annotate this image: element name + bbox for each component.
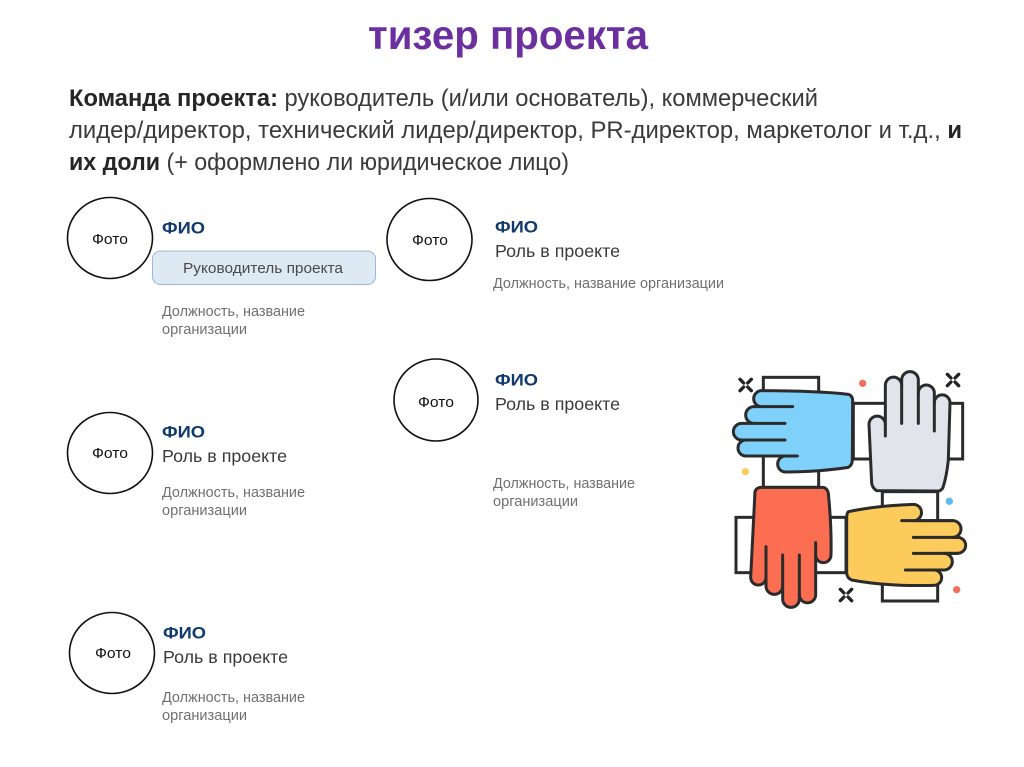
team member: bottom left: Фото [95, 645, 131, 662]
wrists [736, 377, 963, 601]
team member: lower left [68, 412, 305, 519]
team member: bottom left: организации [162, 708, 247, 724]
illustration: four interlocked hands [733, 372, 966, 607]
intro text block: лидер/директор, технический лидер/директор, PR-директор, маркетолог и т.д., и [69, 117, 962, 144]
team member: top middle: Должность, название организации [493, 276, 724, 292]
team member: project leader: Должность, название [162, 304, 305, 320]
icon: red hand [751, 487, 831, 607]
role badge: Руководитель проекта [183, 260, 344, 277]
role badge [152, 251, 376, 284]
intro text block [69, 85, 962, 176]
team member: project leader: ФИО [162, 218, 205, 238]
team member: lower left: организации [162, 503, 247, 519]
team member: top middle [387, 198, 724, 292]
team member: project leader: Фото [92, 231, 128, 248]
team member: middle: организации [493, 494, 578, 510]
icon: blue hand [733, 391, 853, 472]
intro text block: Команда проекта: руководитель (и/или основатель), коммерческий [69, 85, 818, 112]
intro text block: их доли (+ оформлено ли юридическое лицо) [69, 149, 569, 176]
team member: bottom left: Должность, название [162, 690, 305, 706]
team member: project leader [68, 198, 376, 338]
team member: project leader: организации [162, 322, 247, 338]
coloured dots [742, 380, 960, 593]
team member: middle: ФИО [495, 370, 538, 390]
team member: top middle: Фото [412, 232, 448, 249]
team member: bottom left [70, 612, 305, 724]
team member: top middle: ФИО [495, 218, 538, 236]
team member: lower left: ФИО [162, 422, 205, 442]
team member: middle: Роль в проекте [495, 394, 620, 414]
team member: bottom left: Роль в проекте [163, 647, 288, 667]
icon: grey hand [869, 372, 950, 491]
team member: lower left: Должность, название [162, 485, 305, 501]
icon: yellow hand [847, 504, 966, 586]
team member: bottom left: ФИО [163, 624, 206, 642]
team member: lower left: Роль в проекте [162, 446, 287, 466]
sparkles [740, 374, 959, 601]
team member: middle: Фото [418, 394, 454, 411]
team member: top middle: Роль в проекте [495, 241, 620, 261]
team member: middle: Должность, название [493, 476, 635, 492]
team member: lower left: Фото [92, 445, 128, 462]
title: тизер проекта [368, 12, 649, 58]
team member: middle [394, 359, 635, 510]
